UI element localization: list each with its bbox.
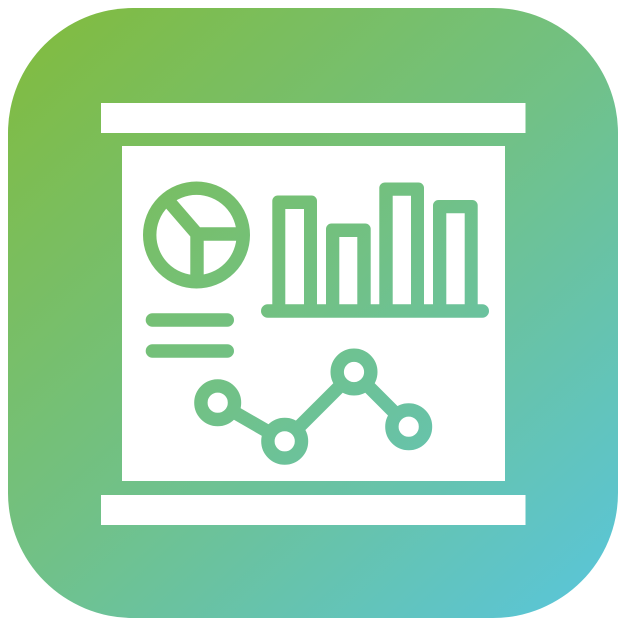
white presentation panel	[122, 146, 505, 481]
text lines	[146, 313, 234, 358]
chart baseline	[261, 304, 489, 318]
top board rail	[101, 103, 526, 133]
bottom board rail	[101, 495, 526, 525]
pie chart	[150, 188, 243, 285]
bar chart	[261, 182, 489, 318]
bar 3	[379, 182, 424, 310]
bar 4	[433, 200, 478, 310]
line chart	[201, 355, 426, 458]
bar 1	[272, 196, 317, 310]
bar 2	[326, 224, 371, 310]
